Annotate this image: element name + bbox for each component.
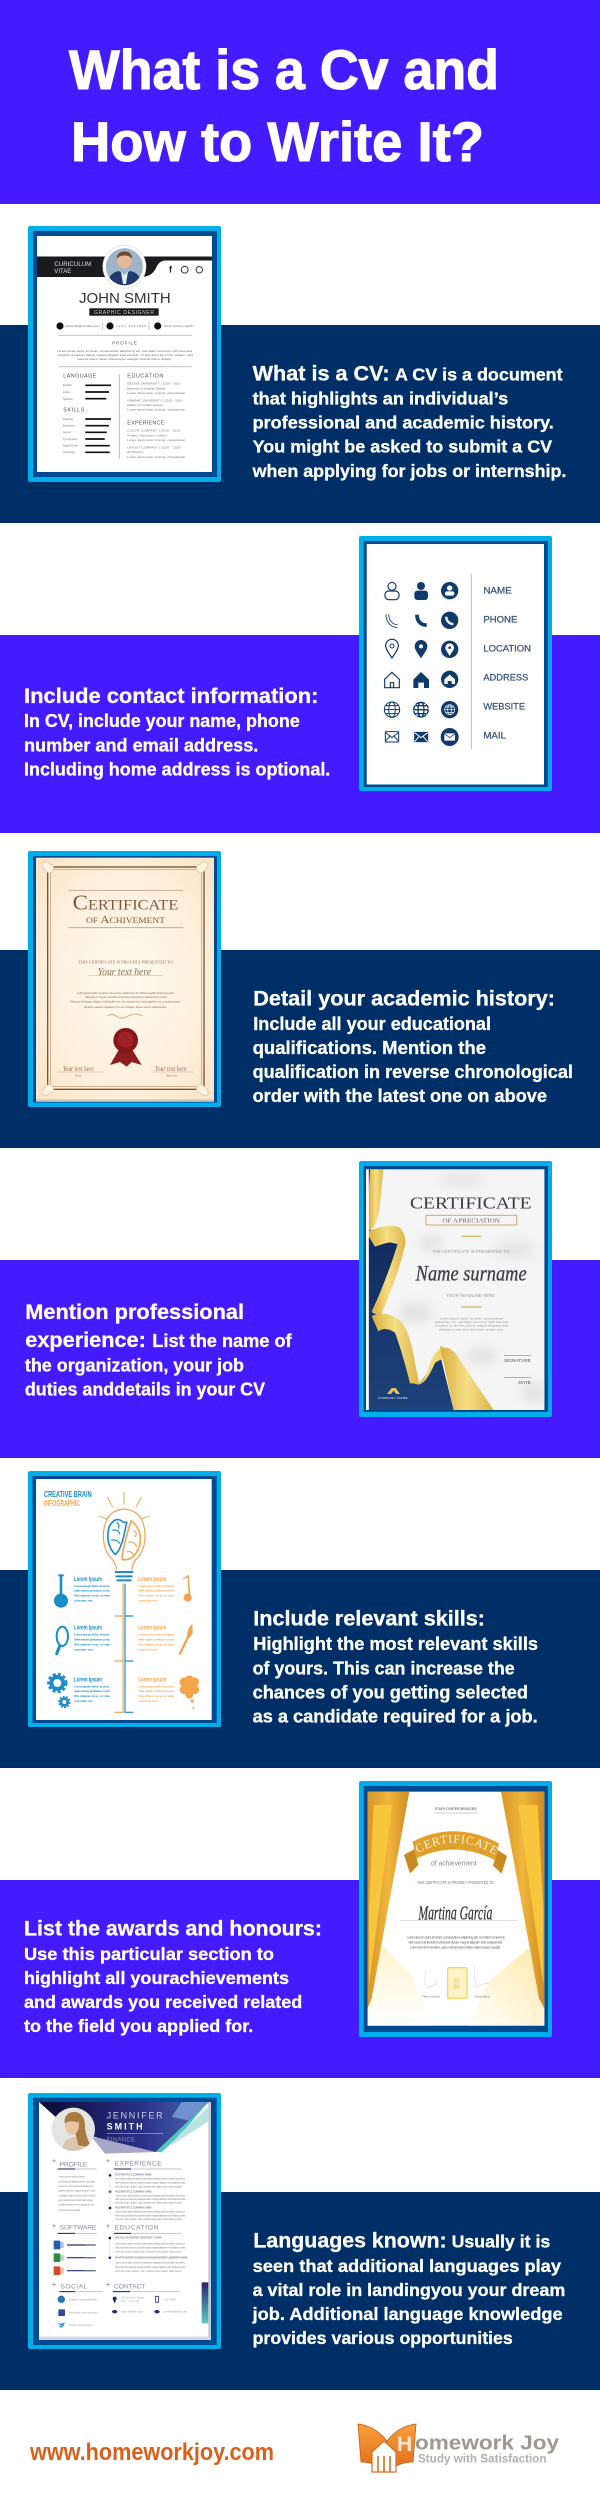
wax seal — [110, 1028, 142, 1067]
image frame: CV template — [28, 226, 221, 482]
right column items: Lorem Ipsum — [138, 1626, 166, 1632]
experience and education text: nibh euismod tincidunt ut laoreet dolore magna aliquam erat volutpat ut wisi — [115, 2214, 185, 2217]
experience and education text: BACHELOR DEGREE UNIVERSITY NAME — [115, 2237, 162, 2240]
software icons — [54, 2241, 96, 2275]
resume section headings: PROFILE — [60, 2162, 88, 2169]
corner ornaments — [42, 862, 208, 1096]
text block: awards and honours: highlight all yourachievements — [24, 1968, 289, 1988]
image frame: CV template: GRAPHIC UNIVERSITY | 2015 - 2020 — [127, 398, 183, 402]
text block: relevant skills: chances of you getting selected — [253, 1683, 528, 1703]
icon labels: PHONE — [483, 614, 517, 624]
image frame: certificate of achievement: OF ACHIVEMENT — [86, 915, 165, 926]
marble texture — [398, 1173, 548, 1403]
resume section headings: + — [106, 2157, 111, 2166]
experience and education text: nibh euismod tincidunt ut laoreet dolore magna aliquam erat volutpat ut wisi — [115, 2266, 185, 2269]
signatures and seal: 20 — [453, 1984, 459, 1990]
right column items: suavitate nec. — [138, 1599, 158, 1603]
text block: professional experience: the organization, your job — [25, 1356, 244, 1376]
image frame: Jennifer Smith resume: SMITH — [107, 2122, 143, 2132]
left column items: Lorem Ipsum — [74, 1626, 102, 1632]
image frame: golden certificate: Lorem ipsum dolor sit amet, consectetuer adipiscing elit, sed diam nonummy — [407, 1936, 505, 1940]
experience and education text: POSITION TITLE COMPANY NAME — [115, 2190, 152, 2193]
profile text: consectetuer adipiscing elit, sed diam — [58, 2180, 95, 2183]
experience and education text: Lorem ipsum dolor sit amet, consectetuer adipiscing elit, sed diam nonummy — [115, 2178, 186, 2181]
text block: awards and honours — [24, 1918, 322, 2036]
image frame: golden certificate: nibh euismod tincidunt ut laoreet dolore magna aliquam erat volutpat wisi — [408, 1941, 503, 1945]
text block: academic history — [253, 988, 573, 1106]
icon labels — [483, 585, 531, 740]
profile text: Lorem ipsum dolor sit amet — [58, 2176, 85, 2179]
image frame: CV template: Lorem ipsum dolor sit amet, consectetuer adipiscing elit, sed diam nonummy nibh euismod — [57, 349, 192, 353]
image frame: CV template: JOHN SMITH — [79, 290, 171, 307]
right column items: Wot ullamer sit ac, et vitae — [138, 1694, 175, 1698]
text block: languages known: job. Additional language knowledge — [252, 2304, 563, 2324]
experience and education text: enim ad minim veniam, quis nostrud exerci tation ullamcorper suscipit — [115, 2202, 182, 2205]
contact icons: +123 4567 — [164, 2300, 177, 2302]
signatures and seal: Director Name — [474, 1995, 490, 1999]
left column items: vitae mauris profusius cu lac — [74, 1637, 110, 1641]
image frame: Jennifer Smith resume: JENNIFER — [107, 2111, 163, 2121]
image frame: CV template: English — [63, 383, 72, 387]
footer logo: Homework Joy — [358, 2424, 560, 2472]
image frame: certificate of achievement: CERTIFICATE — [73, 892, 178, 914]
panel: languages known — [0, 2093, 600, 2390]
panel: academic history — [0, 851, 600, 1148]
signatures and seal: 20 — [453, 1978, 459, 1984]
right column items: Lorem ipsum dolor sit amet, — [138, 1633, 174, 1637]
image frame: certificate of appreciation: Lorem ipsum dolor sit amet, consectetuer — [440, 1316, 503, 1320]
icon: website row — [384, 701, 458, 718]
icon: name row — [385, 582, 458, 600]
image frame: CV template: Lorem ipsum dolor sit amet, consectetuer — [127, 408, 185, 412]
image frame: creative brain infographic — [28, 1471, 221, 1727]
text block: professional experience: experience: — [25, 1329, 146, 1352]
image frame: golden certificate: Martina García — [418, 1902, 492, 1924]
contact icons: jennifer@email.com — [163, 2311, 187, 2314]
image frame: CV template: COLOR COMPANY | 2018 - 2020 — [127, 428, 181, 432]
image frame: certificate of appreciation: SIGNATURE — [504, 1358, 531, 1363]
image frame: CV template: DESIGN UNIVERSITY | 2010 - 2015 — [127, 381, 181, 385]
resume section headings: EXPERIENCE — [115, 2160, 162, 2167]
image frame: certificate of achievement: Date — [75, 1074, 82, 1078]
image frame: certificate of achievement: Your text here — [63, 1065, 94, 1073]
experience and education text: enim ad minim veniam, quis nostrud exerci tation ullamcorper — [115, 2270, 182, 2273]
signatures and seal: Place Your Name — [422, 1995, 440, 1999]
image frame: certificate of achievement — [28, 851, 221, 1107]
profile text: nonummy nibh euismod tincidunt ut — [58, 2185, 94, 2188]
right column items: vitae mauris profusius cu lac — [138, 1637, 175, 1641]
panel: awards and honours — [0, 1781, 600, 2078]
image frame: CV template: LAYOUT COMPANY | 2020 - 2028 — [127, 445, 181, 449]
company logo — [378, 1388, 408, 1400]
social icons: linkedin.com/in/jennifer — [69, 2298, 98, 2301]
image frame: golden certificate: THIS CERTIFICATE IS PROUDLY PRESENTED TO — [417, 1880, 494, 1885]
image frame: CV template: f — [169, 264, 173, 274]
image frame: creative brain infographic: INFOGRAPHIC — [44, 1498, 80, 1508]
icon: paint brush — [180, 1624, 193, 1654]
image frame: certificate of appreciation: DATE — [518, 1380, 531, 1385]
text block: academic history: qualification in reverse chronological — [253, 1062, 573, 1082]
icon: phone row — [387, 612, 458, 629]
image frame: certificate of appreciation: THE CERTIFICATE IS PRESENTED TO: — [432, 1249, 510, 1254]
text block: relevant skills — [253, 1608, 538, 1727]
panel: relevant skills — [0, 1471, 600, 1768]
text block: languages known: a vital role in landingyou your dream — [253, 2280, 565, 2300]
text block: academic history: Detail your academic history: — [253, 988, 555, 1011]
experience and education text: Lorem ipsum dolor sit amet, consectetuer adipiscing elit, sed diam nonummy — [115, 2211, 186, 2214]
text block: awards and honours: List the awards and honours: — [24, 1918, 322, 1941]
text block: academic history: Include all your educational — [253, 1014, 491, 1034]
experience and education text: Lorem ipsum dolor sit amet, consectetuer adipiscing elit, sed diam nonummy — [115, 2262, 186, 2265]
image frame: CV template: Digital Draw — [63, 444, 79, 448]
footer logo: Homework Joy: Study with Satisfaction — [418, 2454, 546, 2466]
icon labels: MAIL — [483, 730, 506, 740]
image frame: creative brain infographic: CREATIVE BRAIN — [44, 1489, 92, 1499]
image frame: CV template: PROFILE — [112, 341, 137, 346]
icon: address row — [385, 671, 458, 688]
image frame: CV template: Lorem ipsum dolor sit amet, consectetuer — [127, 391, 185, 395]
text block: awards and honours: Use this particular section to — [24, 1944, 274, 1964]
title — [69, 38, 499, 173]
profile text: commodo consequat — [58, 2209, 80, 2212]
image frame: certificate of appreciation — [359, 1161, 552, 1417]
right column items: suavitate nec. — [138, 1699, 158, 1703]
text block: what is a CV — [252, 362, 566, 481]
image frame: CV template: Graphic Illustrator | Intern | — [127, 433, 168, 437]
left column items: suavitate nec. — [74, 1599, 94, 1603]
text block: languages known: seen that additional languages play — [253, 2256, 561, 2276]
right column items: vitae mauris profusius cu lac — [138, 1689, 175, 1693]
image frame: golden certificate: of achievement — [431, 1859, 477, 1868]
text block: professional experience — [25, 1301, 293, 1400]
right column items: Wot ullamer sit ac, et vitae — [138, 1642, 175, 1646]
image frame: golden certificate — [359, 1781, 552, 2037]
profile text — [58, 2176, 96, 2212]
right column items: Lorem ipsum dolor sit amet, — [138, 1684, 174, 1688]
profile text: laoreet dolore magna aliquam erat — [58, 2190, 95, 2193]
icon: location row — [386, 639, 458, 658]
image frame: certificate of achievement: Vivamus sodales vulputate eros nec tristique. Maecenas ac nulla dictum — [83, 1005, 167, 1009]
image frame: CV template: Spanish — [63, 397, 73, 401]
text block: what is a CV: that highlights an individual’s — [253, 389, 508, 409]
image frame: certificate of achievement: Your text here — [98, 967, 152, 978]
image frame: CV template: Indian — [63, 390, 71, 394]
text block: awards and honours: to the field you applied for. — [24, 2016, 253, 2036]
resume section headings: + — [52, 2280, 57, 2289]
icon labels: ADDRESS — [483, 672, 528, 682]
profile text: quis nostrud exerci tation ullamcorper — [58, 2199, 94, 2202]
text block: contact information: Including home address is optional. — [24, 760, 330, 780]
text block: contact information: Include contact information: — [24, 685, 318, 708]
icon: music note — [182, 1575, 192, 1602]
image frame: CV template: Lorem ipsum dolor sit amet, consectetuer — [127, 438, 185, 442]
image frame: CV template: VITAE — [54, 269, 71, 275]
icon: open book with house — [358, 2424, 416, 2472]
resume section headings: SOFTWARE — [60, 2224, 97, 2231]
image frame: certificate of appreciation: Name surname — [415, 1260, 527, 1285]
image frame: Jennifer Smith resume: FINANCE — [107, 2137, 135, 2143]
right column items: suavitate nec. — [138, 1647, 158, 1651]
ribbon banner — [404, 1831, 507, 1874]
image frame: certificate of achievement: Director — [166, 1074, 178, 1078]
experience and education text: enim ad minim veniam, quis nostrud exerci tation ullamcorper — [115, 2250, 182, 2253]
footer website address: www.homeworkjoy.com — [29, 2439, 274, 2466]
ribbon banner: CERTIFICATE — [416, 1834, 498, 1855]
icon: thought cloud — [180, 1675, 199, 1709]
image frame: certificate of appreciation: OF APRECIATION — [442, 1218, 500, 1225]
text block: relevant skills: Include relevant skills: — [253, 1608, 485, 1630]
text block: professional experience: Mention professional — [25, 1301, 244, 1324]
text block: what is a CV: professional and academic history. — [253, 413, 554, 433]
image frame: certificate of appreciation: adipiscing elit, sed diam nonummy nibh euismod — [435, 1320, 509, 1324]
icon: mail row — [385, 728, 459, 746]
resume section headings: + — [106, 2222, 111, 2231]
image frame: certificate of appreciation: tincidunt ut laoreet dolore magna aliquam erat — [435, 1324, 508, 1328]
image frame: certificate of appreciation: YOUR HEADLINE HERE — [446, 1293, 495, 1298]
right column items: Lorem ipsum dolor sit amet, — [138, 1584, 174, 1588]
experience and education text: nibh euismod tincidunt ut laoreet dolore magna aliquam erat volutpat ut wisi — [115, 2181, 185, 2184]
title: How to Write It? — [71, 110, 484, 173]
social icons: twitter.com/jennifer — [69, 2324, 93, 2327]
image frame: CV template: Layout — [63, 430, 71, 434]
left column items: Lorem Ipsum — [74, 1577, 102, 1583]
image frame: CV template: nostrud exerci tation ullamcorper suscipit lobortis nisl ut aliquip. — [77, 357, 172, 361]
image frame: CV template: Art Director — [127, 450, 143, 454]
resume section headings: + — [106, 2280, 111, 2289]
contact icons: City, Country — [121, 2300, 140, 2303]
right column items: Lorem Ipsum — [138, 1677, 166, 1683]
portrait — [51, 2107, 96, 2152]
left column items: Lorem ipsum dolor sit amet, — [74, 1633, 110, 1637]
resume section headings: EDUCATION — [115, 2224, 159, 2231]
experience and education text: Lorem ipsum dolor sit amet, consectetuer adipiscing elit, sed diam nonummy — [115, 2242, 186, 2245]
company logo: COMPANY NAME — [378, 1396, 408, 1400]
text block: what is a CV: A CV is a document — [395, 364, 563, 384]
text block: relevant skills: Highlight the most relevant skills — [253, 1634, 538, 1654]
title: What is a Cv and — [69, 38, 499, 101]
icon: open book with house: H — [397, 2433, 412, 2456]
image frame: CV template: johnsmith@company.com — [64, 324, 100, 328]
panel: contact information — [0, 536, 600, 833]
signatures and seal — [422, 1965, 490, 1999]
profile text: suscipit lobortis nisl ut aliquip ex ea — [58, 2204, 94, 2207]
resume header graphic — [39, 2102, 209, 2154]
icon: gears — [48, 1674, 70, 1707]
text block: what is a CV: when applying for jobs or internship. — [252, 461, 566, 481]
image frame: CV template: SKILLS — [63, 408, 85, 414]
icon: magnifier — [57, 1627, 68, 1654]
profile text: volutpat ut wisi enim ad minim veniam — [58, 2194, 96, 2197]
experience and education text: enim ad minim veniam, quis nostrud exerci tation ullamcorper suscipit — [115, 2218, 182, 2221]
left column items: Lorem ipsum dolor sit amet, — [74, 1684, 110, 1688]
text block: relevant skills: as a candidate required for a job. — [253, 1707, 538, 1727]
resume section headings — [52, 2157, 162, 2290]
header band — [0, 0, 600, 204]
image frame: CV template: +123 4567890 — [116, 324, 146, 328]
light bulb — [98, 1492, 150, 1713]
image frame: CV template: CURICULUM — [54, 262, 91, 268]
text block: what is a CV: What is a CV: — [253, 362, 390, 386]
spotlight shapes — [368, 1945, 432, 2026]
text block: what is a CV: You might be asked to submit a CV — [253, 436, 553, 456]
image frame: Jennifer Smith resume — [28, 2093, 221, 2349]
image frame: certificate of achievement: Vivamus sed augue aliquet, sollicitudin eros non, aliquet nisl. Sed a dapibus est, ac posuere justo — [70, 1000, 181, 1005]
resume section headings: SOCIAL — [60, 2283, 88, 2290]
image frame: CV template: EXPERIENCE — [127, 420, 165, 426]
icon labels: WEBSITE — [483, 701, 525, 711]
image frame: CV template: Bachelor of Graphic Design — [127, 386, 166, 390]
image frame: CV template: Illustration — [63, 424, 76, 428]
experience and education text: POSITION TITLE COMPANY NAME — [115, 2174, 152, 2177]
text block: professional experience: List the name of — [152, 1331, 293, 1351]
right column items: vitae mauris profusius cu lac — [138, 1589, 175, 1593]
image frame: CV template: Lorem ipsum dolor sit amet, consectetuer — [127, 455, 185, 459]
text block: academic history: order with the latest one on above — [253, 1086, 547, 1106]
icon labels: NAME — [483, 585, 512, 595]
text block: contact information — [24, 685, 330, 780]
curtains — [368, 1792, 544, 2008]
image frame: CV template: Master of Graphic Design — [127, 403, 164, 407]
image frame: CV template: GRAPHIC DESIGNER — [94, 310, 154, 316]
contact icons — [112, 2296, 187, 2314]
contact icons: www.website.com — [121, 2311, 143, 2314]
left column items: Lorem Ipsum — [74, 1677, 102, 1683]
text block: academic history: qualifications. Mention the — [253, 1038, 486, 1058]
contact icons: 123 Street Name — [121, 2297, 145, 2300]
image frame: certificate of achievement: Lorem ipsum dolor sit amet, consectetur adipiscing elit. Nullam sagittis dictum posuere — [76, 991, 175, 996]
right column items — [138, 1577, 175, 1703]
social icons — [58, 2296, 98, 2328]
image frame: golden certificate: STUDY CENTER REGOCIES — [435, 1807, 477, 1811]
image frame: CV template: UI Design — [63, 450, 75, 454]
resume section headings: + — [52, 2157, 57, 2166]
text block: languages known: Usually it is — [452, 2232, 551, 2252]
text block: languages known: Languages known: — [253, 2230, 447, 2253]
gold ribbon — [368, 1169, 494, 1410]
image frame: certificate of achievement: THIS CERTIFICATE IS PROUDLY PRESENTED TO — [78, 959, 173, 964]
text block: awards and honours: and awards you received related — [24, 1992, 302, 2012]
left column items: Wot ullamer sit ac, et vitae — [74, 1642, 110, 1646]
image frame: CV template: LANGUAGE — [63, 374, 97, 380]
panel: what is a CV — [0, 226, 600, 523]
image frame: CV template: Typography — [63, 437, 78, 441]
image frame: golden certificate: enim ad minim veniam, quis nostrud exerci tation ullamcorper suscipit. — [410, 1946, 501, 1950]
text block: relevant skills: of yours. This can increase the — [253, 1658, 515, 1678]
experience and education text: MASTER DEGREE BUSINESS AND MANAGEMENT UNIVERSITY NAME — [115, 2256, 188, 2259]
resume section headings: + — [52, 2222, 57, 2231]
image frame: CV template: tincidunt ut laoreet dolore magna aliquam erat volutpat. Ut wisi enim ad minim veniam, quis — [57, 353, 194, 357]
resume section headings: CONTACT — [114, 2283, 145, 2290]
left column items: suavitate nec. — [74, 1647, 94, 1651]
text block: contact information: In CV, include your name, phone — [24, 711, 300, 731]
experience and education text: Lorem ipsum dolor sit amet, consectetuer adipiscing elit, sed diam nonummy — [115, 2194, 186, 2197]
image frame: certificate of appreciation: CERTIFICATE — [410, 1193, 532, 1212]
left column items: Lorem ipsum dolor sit amet, — [74, 1584, 110, 1588]
text block: contact information: number and email address. — [24, 735, 258, 755]
image frame: CV template: North Country, Earth — [164, 324, 193, 328]
left column items: vitae mauris profusius cu lac — [74, 1589, 110, 1593]
footer logo: Homework Joy: omework Joy — [415, 2433, 560, 2455]
image frame: contact icons — [359, 536, 552, 791]
left column items: Wot ullamer sit ac, et vitae — [74, 1694, 110, 1698]
experience and education text: nibh euismod tincidunt ut laoreet dolore magna aliquam erat volutpat ut wisi — [115, 2246, 185, 2249]
right column items: Wot ullamer sit ac, et vitae — [138, 1594, 175, 1598]
experience and education text: enim ad minim veniam, quis nostrud exerci tation ullamcorper suscipit — [115, 2185, 182, 2188]
left column items: Wot ullamer sit ac, et vitae — [74, 1594, 110, 1598]
experience and education text — [115, 2174, 188, 2273]
image frame: CV template: Drawing — [63, 417, 73, 421]
text block: languages known: provides various opportunities — [253, 2328, 513, 2348]
left column items: suavitate nec. — [74, 1699, 94, 1703]
social icons: facebook.com/jennifer — [69, 2312, 98, 2315]
experience and education text: nibh euismod tincidunt ut laoreet dolore magna aliquam erat volutpat ut wisi — [115, 2198, 185, 2201]
experience and education text: POSITION TITLE COMPANY NAME — [115, 2207, 152, 2210]
text block: languages known — [252, 2230, 565, 2348]
left column items — [74, 1577, 110, 1703]
text block: professional experience: duties anddetails in your CV — [25, 1380, 265, 1400]
image frame: certificate of appreciation: volutpat ut wisi enim ad minim veniam quis — [439, 1327, 503, 1331]
image frame: certificate of achievement: Your text here — [155, 1065, 187, 1073]
panel: professional experience — [0, 1161, 600, 1458]
icon: flask — [54, 1574, 68, 1608]
icon labels: LOCATION — [483, 643, 531, 653]
right column items: Lorem Ipsum — [138, 1577, 166, 1583]
image frame: certificate of achievement: Aliquam ac neque, convallis in tempus pellentesque, ullamcorper et erat — [84, 995, 167, 1000]
image frame: CV template: EDUCATION — [127, 374, 163, 380]
left column items: vitae mauris profusius cu lac — [74, 1689, 110, 1693]
